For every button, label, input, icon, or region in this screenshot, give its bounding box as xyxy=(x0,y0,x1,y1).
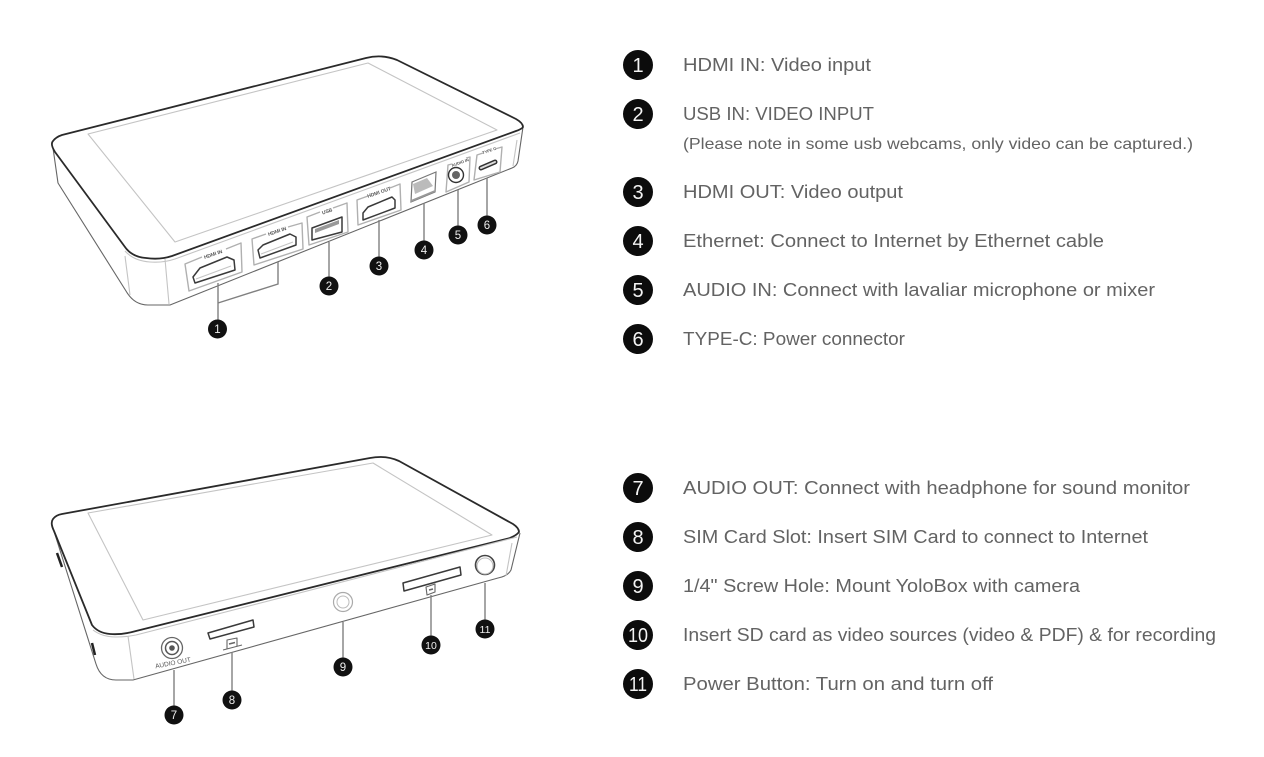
port: USB xyxy=(307,203,348,245)
device illustration: rear view with ports xyxy=(52,56,523,339)
marker 10 xyxy=(422,636,440,654)
legend item 9 xyxy=(623,571,1081,601)
device illustration: side view with slots xyxy=(52,457,520,724)
slot: SD card xyxy=(403,567,461,595)
legend item 11: Power Button: Turn on and turn off xyxy=(683,673,994,694)
legend item 2: (Please note in some usb webcams, only video can be captured.) xyxy=(683,136,1193,153)
corner seams xyxy=(128,543,512,679)
legend item 6 xyxy=(623,324,905,354)
legend item 3 xyxy=(623,177,903,207)
legend item 7: AUDIO OUT: Connect with headphone for sound monitor xyxy=(683,477,1190,498)
port: HDMI OUT xyxy=(357,184,401,225)
legend item 2: 2 xyxy=(632,104,644,126)
tripod screw hole xyxy=(334,592,352,612)
device top surface xyxy=(52,56,523,259)
left side ports xyxy=(57,553,95,655)
legend item 6: 6 xyxy=(632,329,644,351)
marker 3: 3 xyxy=(376,261,382,273)
marker 2 xyxy=(320,276,338,296)
legend item 8: SIM Card Slot: Insert SIM Card to connect to Internet xyxy=(683,526,1148,547)
legend item 8: 8 xyxy=(632,527,644,549)
callout lines xyxy=(218,178,487,320)
marker 7: 7 xyxy=(171,710,177,722)
lower lip highlight xyxy=(125,133,520,262)
marker 8: 8 xyxy=(229,695,235,707)
legend item 11: 11 xyxy=(629,674,647,696)
marker 9 xyxy=(334,658,352,676)
legend item 1: HDMI IN: Video input xyxy=(683,54,871,75)
legend item 6: TYPE-C: Power connector xyxy=(683,328,905,349)
legend item 7 xyxy=(623,473,1190,503)
marker 8 xyxy=(222,690,242,710)
marker 4: 4 xyxy=(421,245,428,257)
port: AUDIO IN xyxy=(446,157,470,192)
port: USB: USB xyxy=(321,207,334,217)
legend item 5 xyxy=(623,275,1155,305)
legend item 1: 1 xyxy=(632,55,644,77)
lower lip highlight xyxy=(93,537,517,637)
legend item 4: Ethernet: Connect to Internet by Ethernet cable xyxy=(683,230,1104,251)
legend item 4 xyxy=(623,226,1104,256)
slot: SIM card xyxy=(208,620,254,650)
legend item 10: 10 xyxy=(628,625,648,647)
marker 6: 6 xyxy=(484,220,490,232)
legend item 10: Insert SD card as video sources (video & PDF) & for recording xyxy=(683,624,1216,645)
legend item 3: HDMI OUT: Video output xyxy=(683,181,903,202)
marker 7 xyxy=(164,706,184,724)
port: HDMI IN 2: HDMI IN xyxy=(267,226,288,238)
marker 10: 10 xyxy=(425,640,437,652)
port: HDMI OUT: HDMI OUT xyxy=(367,186,392,200)
marker 11: 11 xyxy=(480,624,491,636)
marker 1: 1 xyxy=(214,324,221,336)
marker 5: 5 xyxy=(455,230,461,242)
device body side outline xyxy=(52,525,520,680)
marker 5 xyxy=(448,226,468,244)
legend item 8 xyxy=(623,522,1148,552)
port: Ethernet xyxy=(411,172,436,202)
marker 4 xyxy=(414,240,434,260)
marker 9: 9 xyxy=(340,662,346,674)
marker 3 xyxy=(370,256,388,276)
corner seams xyxy=(125,140,517,304)
screen xyxy=(88,463,492,620)
legend item 2: USB IN: VIDEO INPUT xyxy=(683,103,874,124)
legend item 1 xyxy=(623,50,871,80)
port: AUDIO OUT: AUDIO OUT xyxy=(155,657,192,670)
callout lines xyxy=(174,583,485,706)
legend item 2 xyxy=(623,99,1193,153)
marker 11 xyxy=(476,620,494,638)
marker 2: 2 xyxy=(326,281,332,293)
legend item 7: 7 xyxy=(632,478,644,500)
port: HDMI IN 1 xyxy=(185,243,242,291)
port: AUDIO OUT xyxy=(155,638,192,670)
device top surface xyxy=(52,457,519,634)
port: TYPE-C xyxy=(474,146,502,180)
legend item 11 xyxy=(623,669,994,699)
legend item 10 xyxy=(623,620,1216,650)
port: HDMI IN 1: HDMI IN xyxy=(203,249,224,261)
legend item 9: 9 xyxy=(632,576,644,598)
legend item 9: 1/4" Screw Hole: Mount YoloBox with camera xyxy=(683,575,1081,596)
port: HDMI IN 2 xyxy=(252,223,303,265)
port: AUDIO IN: AUDIO IN xyxy=(451,157,470,168)
power button xyxy=(476,556,494,574)
legend item 5: AUDIO IN: Connect with lavaliar microphone or mixer xyxy=(683,279,1155,300)
legend item 4: 4 xyxy=(632,231,644,253)
legend item 3: 3 xyxy=(632,182,644,204)
device body side outline xyxy=(53,127,523,305)
port: TYPE-C: TYPE C xyxy=(482,146,497,155)
marker 6 xyxy=(478,216,496,234)
screen xyxy=(88,63,497,242)
legend item 5: 5 xyxy=(632,280,644,302)
marker 1 xyxy=(208,320,227,338)
